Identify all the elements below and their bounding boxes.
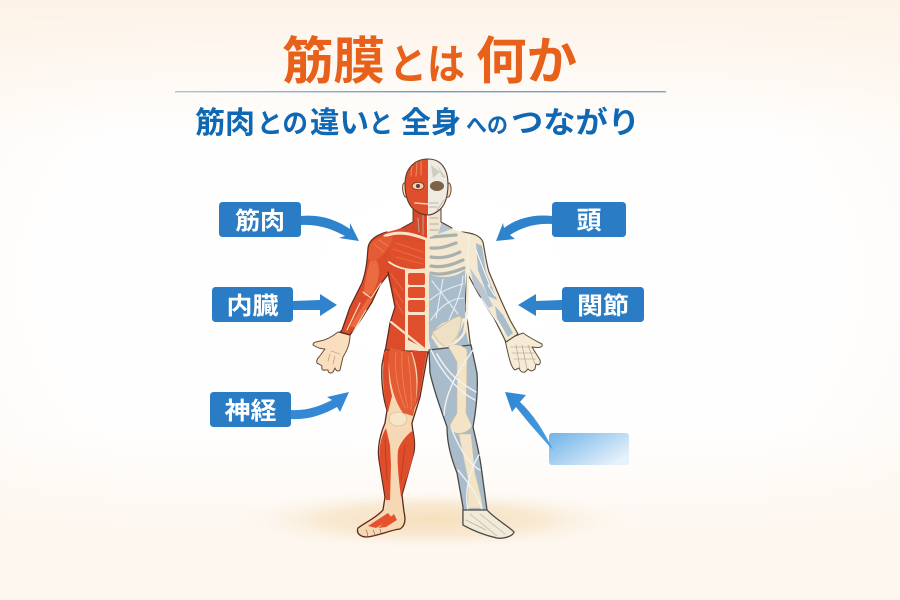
subtitle: 違い xyxy=(310,107,369,140)
head outline xyxy=(405,159,448,215)
deltoid xyxy=(368,236,393,262)
label: 神経 xyxy=(210,392,291,427)
arrow: 神経 to body xyxy=(291,392,349,419)
label: 神経: 神経 xyxy=(224,398,276,425)
arrow: 関節 to body xyxy=(518,294,562,316)
inguinal band xyxy=(391,322,427,351)
shin muscles xyxy=(379,428,391,500)
subtitle: つながり xyxy=(511,106,640,140)
subtitle: との xyxy=(257,109,308,139)
arrow: 内臓 to body xyxy=(293,294,337,316)
tibia xyxy=(459,434,483,508)
left torso xyxy=(368,226,428,352)
title: 筋膜 xyxy=(282,33,385,90)
pelvis xyxy=(432,316,461,347)
arrow: empty label to body xyxy=(505,392,553,450)
title: 何か xyxy=(476,33,577,90)
rib cage xyxy=(431,235,464,274)
left hand xyxy=(313,332,350,373)
collar band xyxy=(385,233,426,239)
pectoral xyxy=(390,239,425,268)
lower abdomen blue xyxy=(430,322,470,350)
label: 筋肉: 筋肉 xyxy=(235,208,285,235)
rectus sheath xyxy=(405,270,428,352)
right torso xyxy=(427,226,471,352)
left arm xyxy=(340,232,390,335)
head: skull half xyxy=(428,159,448,215)
label: 頭 xyxy=(552,202,626,237)
floor shadow xyxy=(227,490,637,550)
subtitle: への xyxy=(466,113,508,138)
left leg xyxy=(357,348,428,537)
fascia lines xyxy=(431,350,482,510)
label: 関節 xyxy=(562,287,644,322)
head: muscle half xyxy=(405,159,428,215)
subtitle: 全身 xyxy=(401,107,461,140)
knee xyxy=(389,412,407,426)
right hand xyxy=(505,333,542,372)
label: 内臓: 内臓 xyxy=(226,293,278,320)
side muscle xyxy=(391,274,403,314)
foot muscles xyxy=(368,513,397,528)
subtitle: 筋肉 xyxy=(195,107,255,140)
neck xyxy=(402,208,452,238)
outer edge of torso xyxy=(385,272,395,352)
title xyxy=(282,33,577,90)
label: 頭: 頭 xyxy=(576,207,602,235)
label: 筋肉 xyxy=(219,202,301,237)
outer edge of torso xyxy=(465,273,471,350)
empty label box xyxy=(549,433,629,465)
title: とは xyxy=(389,41,465,88)
ears xyxy=(403,183,451,197)
subtitle: と xyxy=(369,109,393,139)
subtitle xyxy=(195,106,640,140)
fascia abdomen xyxy=(429,270,465,345)
arrow: 頭 to body xyxy=(496,216,552,241)
femur xyxy=(448,345,472,433)
cream band below pectoral xyxy=(389,262,426,270)
label: 内臓 xyxy=(212,287,293,322)
right leg xyxy=(429,345,514,538)
arrow: 筋肉 to body xyxy=(301,216,359,241)
abdominals xyxy=(408,273,425,285)
anatomy figure xyxy=(313,159,542,538)
right foot xyxy=(463,510,514,538)
thigh muscles xyxy=(383,350,392,412)
label: 関節: 関節 xyxy=(577,293,629,320)
sternum centre line xyxy=(425,232,429,351)
right arm xyxy=(462,232,518,342)
title divider xyxy=(175,91,666,92)
